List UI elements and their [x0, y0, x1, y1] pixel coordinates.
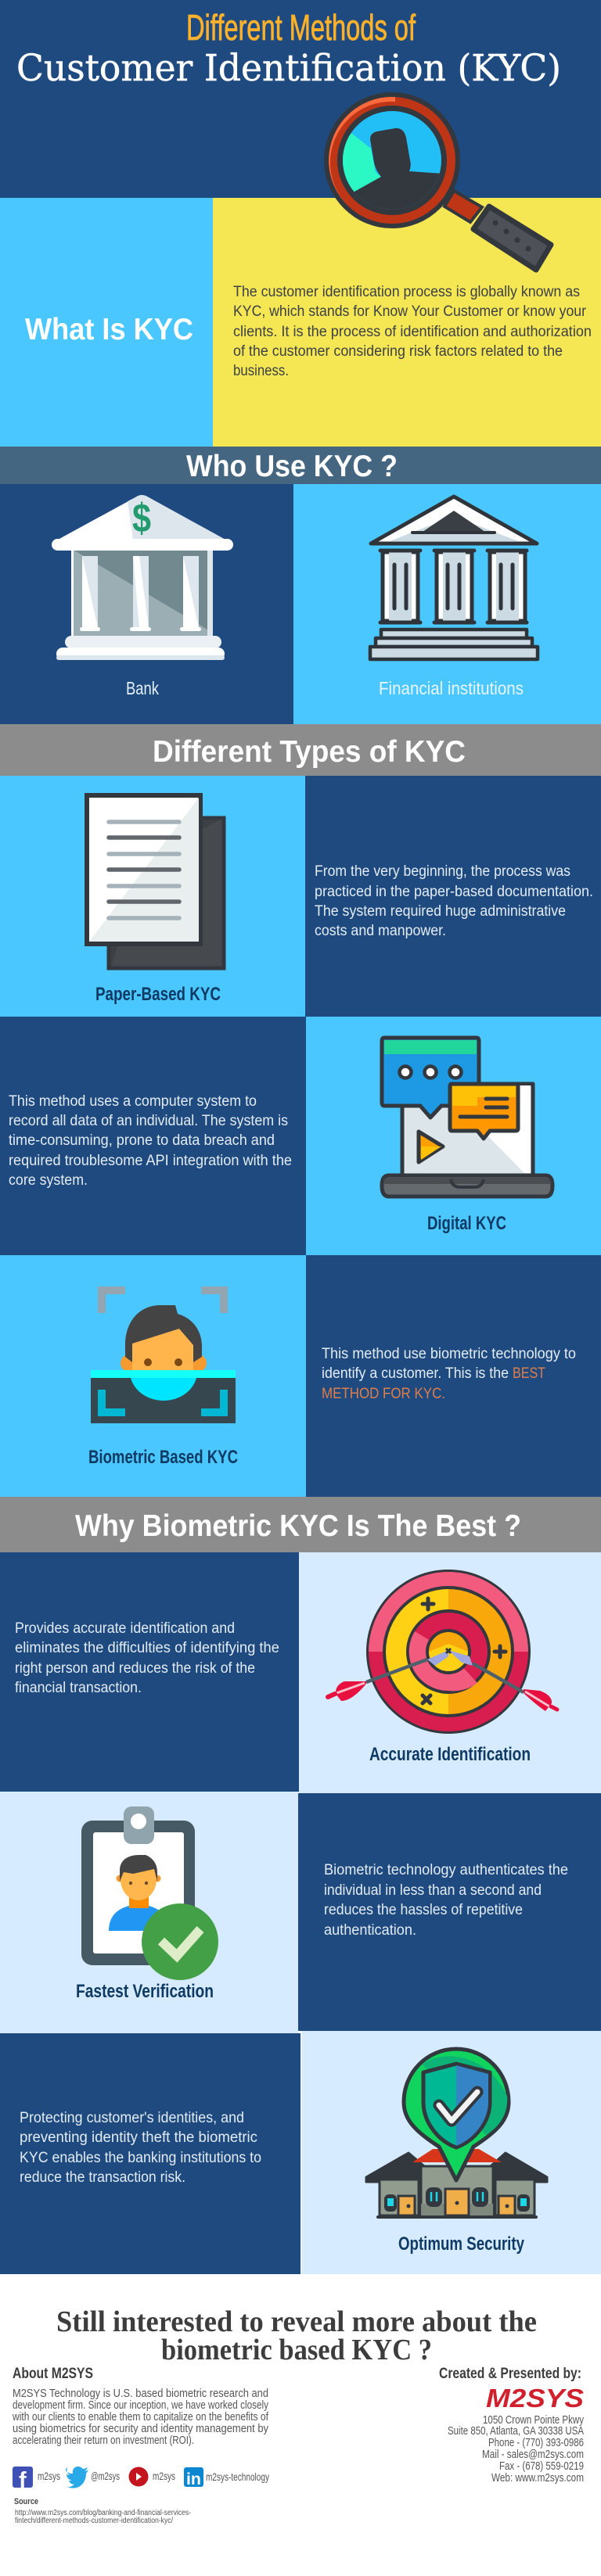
text block: accurate description: eliminates the difficulties of identifying the	[15, 1640, 279, 1656]
label: digital KYC: Digital KYC	[427, 1213, 506, 1234]
text block: KYC definition: of the customer considering risk factors related to the	[233, 343, 563, 360]
text block: fastest description: Biometric technology authenticates the	[324, 1862, 568, 1878]
text block: digital description: record all data of an individual. The system is	[9, 1113, 288, 1129]
source reference	[14, 2497, 191, 2525]
panel: what is KYC	[0, 198, 601, 447]
social links row: @m2sys	[91, 2470, 120, 2482]
label: optimum security: Optimum Security	[398, 2233, 524, 2255]
icon: youtube	[128, 2467, 149, 2487]
source reference: http://www.m2sys.com/blog/banking-and-financial-services-	[15, 2509, 191, 2517]
icon: facebook	[13, 2467, 33, 2493]
text block: fastest description: reduces the hassles of repetitive	[324, 1902, 523, 1918]
panel: financial institutions	[293, 484, 601, 724]
icon: target with arrows	[328, 1570, 557, 1734]
closing question heading	[56, 2305, 537, 2366]
text block: security description	[20, 2110, 261, 2186]
panel: bank	[0, 484, 293, 724]
icon: facebook: f	[19, 2468, 27, 2493]
text block: digital description: time-consuming, prone to data breach and	[9, 1132, 275, 1149]
text block: security description: KYC enables the banking institutions to	[20, 2150, 261, 2166]
text block: security description: Protecting customer's identities, and	[20, 2110, 244, 2126]
closing question heading: biometric based KYC ?	[161, 2334, 432, 2366]
source reference: fintech/different-methods-customer-identification-kyc/	[15, 2517, 173, 2525]
text block: accurate description: financial transaction.	[15, 1680, 142, 1696]
text block: fastest description: individual in less than a second and	[324, 1882, 542, 1899]
social links row: m2sys	[153, 2470, 175, 2482]
icon: magnifying glass with person	[324, 92, 551, 270]
label: biometric based KYC: Biometric Based KYC	[88, 1447, 238, 1468]
text block: accurate description: right person and reduces the risk of the	[15, 1660, 255, 1677]
panel: header background	[0, 0, 601, 198]
panel: paper-based KYC	[0, 776, 601, 1017]
text block: KYC definition: The customer identification process is globally known as	[233, 284, 580, 300]
icon: institution building	[370, 497, 538, 659]
heading band: different types of KYC: Different Types of KYC	[153, 735, 466, 769]
icon: laptop with chat bubbles	[382, 1038, 552, 1197]
text block: biometric description: This method use biometric technology to	[322, 1346, 576, 1362]
text block: accurate description: Provides accurate identification and	[15, 1620, 235, 1637]
panel: digital KYC	[0, 1017, 601, 1255]
heading band: who use KYC	[0, 447, 601, 484]
text block: about paragraph: accelerating their return on investment (ROI).	[13, 2434, 194, 2447]
text block: KYC definition: business.	[233, 363, 289, 379]
text block: contact details	[448, 2413, 584, 2485]
footer: about M2SYS: About M2SYS	[13, 2366, 93, 2382]
text block: biometric description: METHOD FOR KYC.	[322, 1386, 445, 1402]
icon: linkedin: in	[186, 2470, 201, 2488]
text block: accurate description	[15, 1620, 279, 1696]
heading: what is KYC: What Is KYC	[25, 313, 193, 346]
text block: paper-based description: costs and manpower.	[315, 923, 446, 939]
text block: about paragraph	[12, 2387, 269, 2447]
text block: paper-based description	[315, 863, 593, 939]
text block: paper-based description: From the very beginning, the process was	[315, 863, 570, 880]
text block: biometric description: identify a customer. This is the	[322, 1365, 509, 1382]
icon: paper documents	[87, 795, 224, 970]
text block: paper-based description: The system required huge administrative	[315, 903, 566, 920]
social links row: m2sys	[38, 2470, 60, 2482]
heading band: different types of KYC	[0, 724, 601, 776]
text block: KYC definition	[233, 284, 592, 379]
source reference: Source	[14, 2497, 38, 2506]
title	[16, 7, 561, 90]
logo: M2SYS: M2SYS	[486, 2384, 584, 2413]
heading band: why biometric KYC is the best: Why Biometric KYC Is The Best ?	[75, 1509, 521, 1543]
text block: paper-based description: practiced in the paper-based documentation.	[315, 884, 593, 900]
icon: face scanner	[91, 1286, 236, 1423]
text block: KYC definition: clients. It is the process of identification and authorization	[233, 324, 592, 340]
closing question heading: Still interested to reveal more about the	[56, 2305, 537, 2338]
panel: optimum security	[0, 2031, 601, 2274]
text block: security description: reduce the transaction risk.	[20, 2169, 185, 2186]
label: bank: Bank	[126, 678, 159, 698]
text block: about paragraph: with our clients to enable them to capitalize on the benefits of	[12, 2410, 269, 2424]
title: Customer Identification (KYC)	[16, 47, 561, 90]
text block: digital description: required troublesome API integration with the	[9, 1153, 292, 1169]
text block: security description: preventing identity theft the biometric	[20, 2129, 257, 2146]
text block: fastest description: authentication.	[324, 1922, 416, 1939]
label: financial institutions: Financial institutions	[379, 678, 524, 698]
heading band: who use KYC: Who Use KYC ?	[186, 450, 398, 483]
icon: location pin with shield over houses	[366, 2049, 547, 2219]
social links row	[13, 2467, 269, 2493]
text block: about paragraph: M2SYS Technology is U.S. based biometric research and	[13, 2387, 268, 2400]
text block: about paragraph: using biometrics for security and identity management by	[13, 2422, 268, 2435]
social links row: m2sys-technology	[206, 2470, 269, 2483]
panel: fastest verification	[0, 1792, 601, 2033]
icon: linkedin	[184, 2467, 203, 2488]
text block: digital description: core system.	[9, 1172, 88, 1189]
panel: biometric based KYC	[0, 1255, 601, 1497]
icon: twitter	[66, 2467, 88, 2488]
icon: dollar sign: $	[132, 496, 151, 541]
label: paper-based KYC: Paper-Based KYC	[95, 984, 221, 1005]
icon: clipboard with check	[81, 1806, 218, 1980]
panel: accurate identification	[0, 1552, 601, 1793]
text block: digital description: This method uses a computer system to	[9, 1093, 257, 1110]
label: accurate identification: Accurate Identification	[369, 1744, 531, 1765]
icon: bank building	[52, 495, 233, 660]
text block: biometric description: BEST	[513, 1365, 545, 1382]
footer: created and presented by	[439, 2366, 584, 2485]
footer: about M2SYS	[12, 2366, 269, 2447]
text block: about paragraph: development firm. Since our inception, we have worked closely	[13, 2398, 268, 2412]
title: Different Methods of	[186, 7, 416, 48]
text block: fastest description	[324, 1862, 568, 1939]
heading band: why biometric KYC is the best	[0, 1497, 601, 1552]
label: fastest verification: Fastest Verification	[76, 1981, 214, 2002]
text block: digital description	[9, 1093, 292, 1189]
text block: biometric description	[322, 1346, 576, 1402]
